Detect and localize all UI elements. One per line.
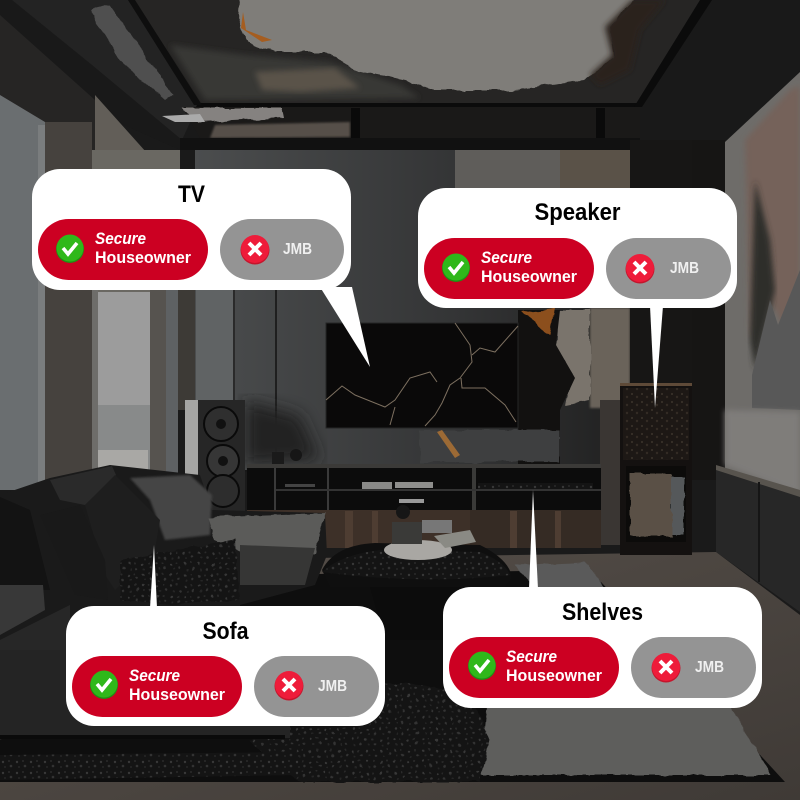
- callout: Sofa: [66, 545, 385, 726]
- option: Secure Houseowner: Houseowner: [481, 267, 577, 286]
- option: Secure Houseowner: Houseowner: [506, 666, 602, 685]
- card: TV: [32, 169, 351, 290]
- pointer: TV: [320, 287, 370, 367]
- heading: Sofa: Sofa: [202, 618, 249, 645]
- heading: Speaker: Speaker: [534, 199, 620, 226]
- option: JMB: [606, 238, 731, 299]
- option: Secure Houseowner: [424, 238, 594, 299]
- card: Speaker: [418, 188, 737, 308]
- heading: Shelves: Shelves: [562, 599, 643, 626]
- side speaker: [185, 400, 245, 512]
- pointer: Speaker: [650, 306, 663, 408]
- option: JMB: [254, 656, 379, 717]
- pointer: Sofa: [150, 545, 157, 608]
- option: JMB: JMB: [283, 241, 312, 258]
- pointer: Shelves: [529, 490, 538, 589]
- media shelves: [247, 449, 601, 548]
- option: JMB: JMB: [318, 678, 347, 695]
- option: Secure Houseowner: [449, 637, 619, 698]
- option: Secure Houseowner: Secure: [129, 666, 180, 685]
- option: Secure Houseowner: Secure: [95, 229, 146, 248]
- callout: Shelves: [443, 490, 762, 708]
- card: Sofa: [66, 606, 385, 726]
- burnt speaker: [620, 383, 692, 555]
- option: JMB: JMB: [670, 260, 699, 277]
- back wall: [195, 140, 725, 545]
- rug: [0, 562, 785, 782]
- callout: TV: [32, 169, 370, 367]
- left wall and window: [0, 15, 196, 492]
- option: Secure Houseowner: Houseowner: [129, 685, 225, 704]
- option: Secure Houseowner: [72, 656, 242, 717]
- callout: Speaker: [418, 188, 737, 408]
- sofa: [0, 465, 327, 739]
- TV: [326, 323, 518, 428]
- option: Secure Houseowner: [38, 219, 208, 280]
- floor: [0, 552, 800, 800]
- option: Secure Houseowner: Houseowner: [95, 248, 191, 267]
- card: Shelves: [443, 587, 762, 708]
- ceiling: [0, 0, 800, 150]
- heading: TV: TV: [178, 181, 205, 208]
- coffee table: [322, 505, 512, 640]
- option: JMB: [220, 219, 344, 280]
- option: JMB: [631, 637, 756, 698]
- option: JMB: JMB: [695, 659, 724, 676]
- option: Secure Houseowner: Secure: [506, 647, 557, 666]
- option: Secure Houseowner: Secure: [481, 248, 532, 267]
- right wall with painting: [716, 72, 800, 612]
